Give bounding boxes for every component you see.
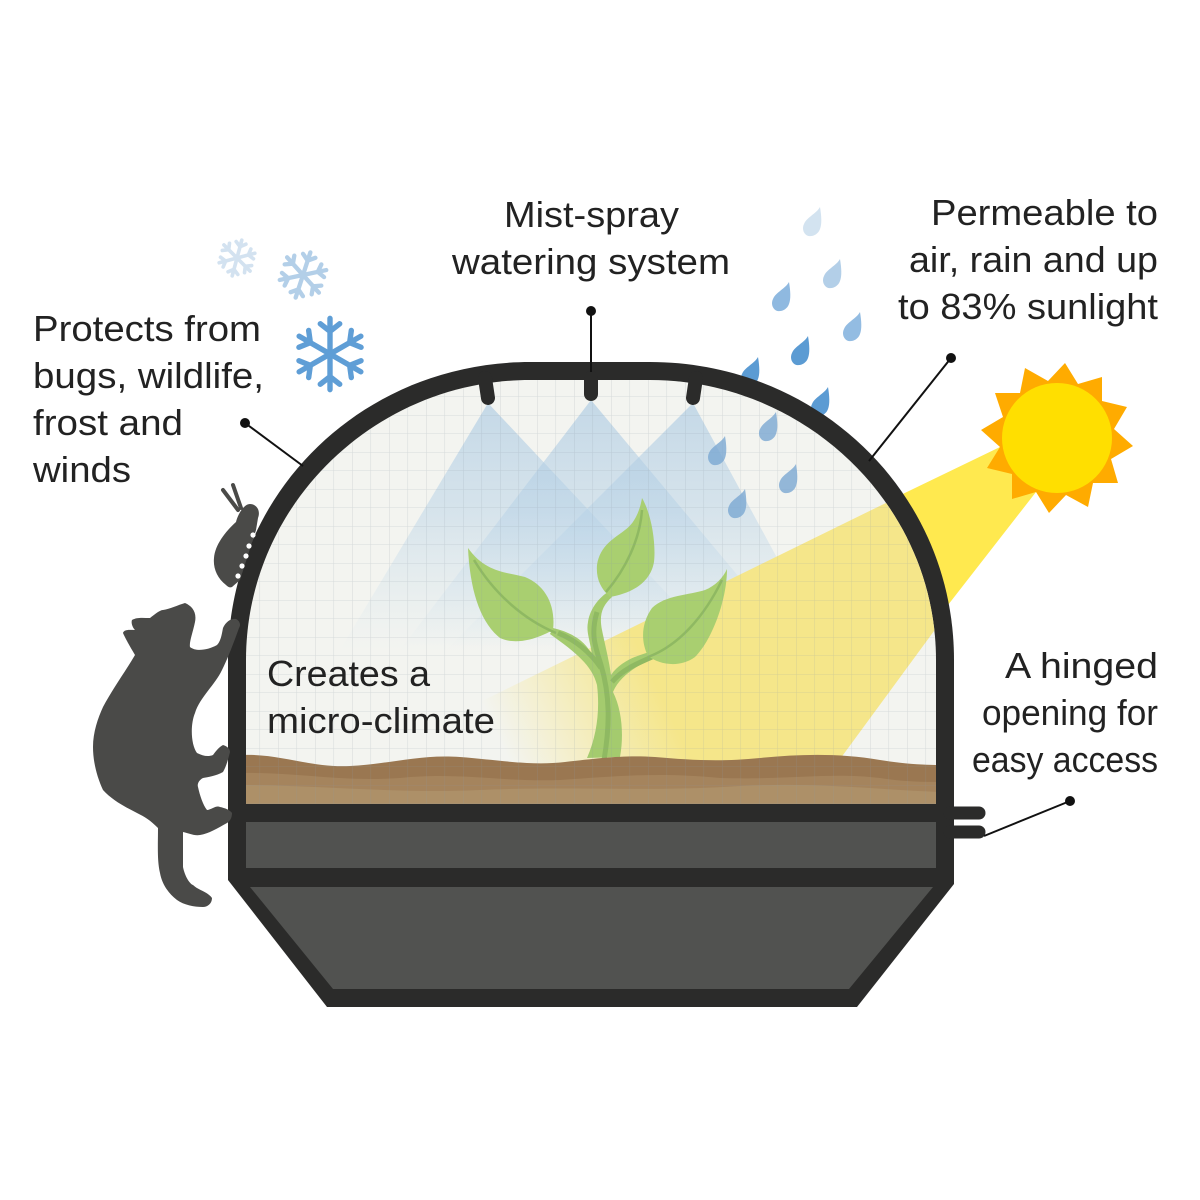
right leaf	[643, 569, 727, 664]
panel: mesh interior	[246, 380, 936, 804]
text: permeable	[898, 192, 1158, 327]
text: micro-climate	[267, 653, 495, 741]
icon: faint snowflake	[214, 235, 260, 281]
soil middle layer	[246, 773, 936, 792]
mesh background	[246, 380, 936, 766]
icon: raccoon silhouette	[93, 603, 240, 907]
sunbeam outside the dome	[880, 447, 1036, 640]
text: protects from: Protects from	[33, 308, 261, 349]
text: mist-spray: Mist-spray	[504, 194, 679, 235]
text: permeable: to 83% sunlight	[898, 286, 1158, 327]
sun disc	[1002, 383, 1112, 493]
cloche frame silhouette	[228, 362, 954, 1007]
soil lower layer	[246, 785, 936, 804]
bug body	[214, 504, 259, 587]
panel: front rim	[246, 822, 936, 868]
callout: hinge leader line	[984, 796, 1075, 836]
text: hinged opening: easy access	[972, 739, 1158, 780]
mist nozzles	[485, 378, 696, 398]
sunbeam inside the dome	[494, 503, 934, 764]
text: micro-climate: Creates a	[267, 653, 431, 694]
callout: bugs leader line	[240, 418, 303, 466]
panel: tray base	[250, 887, 933, 989]
text: mist-spray: watering system	[451, 241, 730, 282]
hinge handles	[950, 813, 979, 832]
soil	[246, 754, 936, 804]
text: protects from	[32, 308, 264, 490]
icon: light snowflake	[273, 245, 333, 305]
callout: mist leader line	[586, 306, 596, 372]
left nozzle	[485, 378, 488, 398]
plant stem	[550, 592, 654, 758]
text: permeable: air, rain and up	[909, 239, 1158, 280]
antennae	[223, 485, 241, 510]
text: micro-climate: micro-climate	[267, 700, 495, 741]
icon: snowflakes	[214, 235, 366, 390]
left leaf	[468, 548, 553, 641]
top leaf	[597, 498, 654, 597]
mist spray cones	[368, 401, 776, 636]
mesh grid	[240, 370, 940, 810]
bug legs	[235, 532, 256, 579]
text: protects from: bugs, wildlife,	[33, 355, 264, 396]
centre nozzle	[584, 378, 598, 394]
stem highlight	[558, 612, 652, 760]
soil top layer	[246, 754, 936, 782]
right nozzle	[693, 378, 696, 398]
text: hinged opening: A hinged	[1005, 645, 1158, 686]
icon: blue snowflake	[294, 318, 366, 390]
sun rays	[981, 363, 1133, 513]
text: protects from: frost and	[33, 402, 183, 443]
callout: permeable leader line	[869, 353, 956, 461]
rain drops outside the frame	[741, 207, 861, 416]
text: protects from: winds	[32, 449, 131, 490]
text: hinged opening	[972, 645, 1158, 780]
hinge band	[228, 804, 954, 822]
icon: sun	[981, 363, 1133, 513]
icon: bug climbing	[214, 485, 259, 587]
rain drops inside the mesh	[708, 412, 797, 518]
text: mist-spray	[451, 194, 730, 282]
icon: plant	[468, 498, 727, 760]
text: hinged opening: opening for	[982, 692, 1158, 733]
text: permeable: Permeable to	[931, 192, 1158, 233]
